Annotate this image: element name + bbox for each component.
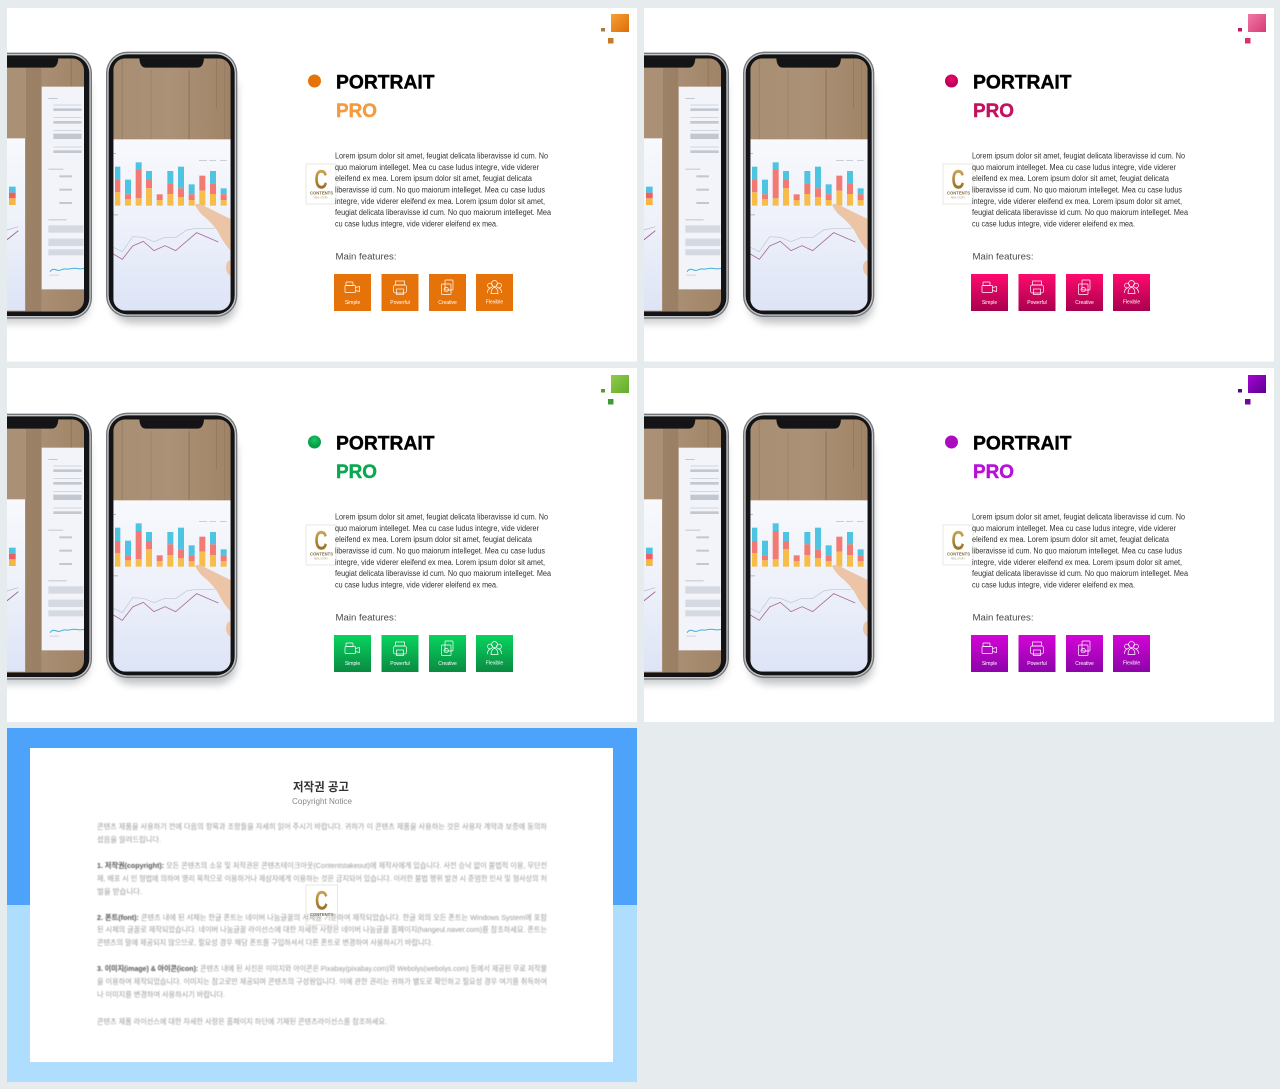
logo watermark: CONTENTS <box>310 190 333 196</box>
logo watermark <box>306 525 336 565</box>
notice section 3: 나 이미지를 변경하여 사용하시기 바랍니다. <box>97 990 225 999</box>
logo watermark: REAL STORY <box>951 556 965 560</box>
body text <box>972 152 1189 228</box>
title: PORTRAIT <box>973 432 1072 454</box>
notice closing line: 콘텐츠 제품 라이선스에 대한 자세한 사항은 홈페이지 하단에 기재된 콘텐츠라이선스를 참조하세요. <box>97 1017 387 1026</box>
phones mockup: green slide <box>0 413 237 684</box>
notice section 1: 1. 저작권(copyright): 모든 콘텐츠의 소유 및 저작권은 콘텐츠테이크아웃(Contentstakeout)에 제작사에게 있습니다. 사전 승낙 없이 불법적 이용, 무단전 <box>97 861 547 870</box>
button: powerful <box>382 274 418 311</box>
body text: Lorem ipsum dolor sit amet, feugiat delicata liberavisse id cum. No <box>972 152 1186 160</box>
body text: cu case ludus integre, vide viderer eleifend ex mea. <box>972 220 1135 228</box>
button: flexible: Flexible <box>1123 660 1140 666</box>
feature buttons <box>971 635 1150 672</box>
button: flexible: Flexible <box>486 300 503 306</box>
button: powerful: Powerful <box>390 300 410 306</box>
body text: feugiat delicata liberavisse id cum. No quo maiorum intelleget. Mea <box>335 569 552 578</box>
title: PRO <box>336 100 377 122</box>
feature buttons <box>334 274 513 311</box>
body text: liberavisse id cum. No quo maiorum intelleget. Mea cu case ludus <box>972 186 1182 194</box>
button: creative <box>1066 635 1103 672</box>
body text: integre, vide viderer eleifend ex mea. Lorem ipsum dolor sit amet, <box>335 197 545 206</box>
button: powerful <box>382 635 418 672</box>
title bullet dot <box>308 436 321 448</box>
body text: Lorem ipsum dolor sit amet, feugiat delicata liberavisse id cum. No <box>972 512 1186 522</box>
logo watermark: REAL STORY <box>314 556 328 560</box>
body text: eleifend ex mea. Lorem ipsum dolor sit amet, feugiat delicata <box>972 174 1170 183</box>
body text: quo maiorum intelleget. Mea cu case ludus integre, vide viderer <box>335 524 539 533</box>
phones mockup: purple slide <box>644 412 878 688</box>
button: simple: Simple <box>982 661 997 667</box>
button: creative: Creative <box>1075 661 1094 667</box>
button: creative: Creative <box>438 661 457 667</box>
notice section 2 <box>97 913 547 947</box>
body text: eleifend ex mea. Lorem ipsum dolor sit amet, feugiat delicata <box>335 535 533 544</box>
main features label: Main features: <box>972 612 1034 624</box>
body text: liberavisse id cum. No quo maiorum intelleget. Mea cu case ludus <box>335 186 545 194</box>
button: flexible <box>476 635 513 672</box>
feature buttons <box>971 274 1150 311</box>
button: powerful: Powerful <box>1027 661 1047 667</box>
logo watermark: REAL STORY <box>951 196 965 200</box>
button: creative: Creative <box>438 300 457 306</box>
logo watermark <box>306 164 336 204</box>
title: PRO <box>973 461 1014 483</box>
body text: feugiat delicata liberavisse id cum. No quo maiorum intelleget. Mea <box>335 208 552 217</box>
body text <box>335 152 552 228</box>
title: PRO <box>336 461 377 483</box>
notice intro: 셨음을 알려드립니다. <box>97 835 161 844</box>
body text: eleifend ex mea. Lorem ipsum dolor sit amet, feugiat delicata <box>972 535 1170 544</box>
button: flexible <box>1113 635 1150 672</box>
button: flexible: Flexible <box>1123 300 1140 306</box>
button: simple <box>971 274 1008 311</box>
feature buttons <box>334 635 513 672</box>
logo watermark: CONTENTS <box>310 552 333 556</box>
title bullet dot <box>945 74 958 88</box>
body text: eleifend ex mea. Lorem ipsum dolor sit amet, feugiat delicata <box>335 174 533 183</box>
body text: cu case ludus integre, vide viderer eleifend ex mea. <box>972 580 1135 590</box>
notice section 1: 재, 배포 시 민 형법에 의하여 영리 목적으로 이용하거나 제삼자에게 이용하는 것은 금지되어 있습니다. 이러한 불법 행위 발견 시 준엄한 민사 및 형사상의 처 <box>97 874 547 883</box>
body text: quo maiorum intelleget. Mea cu case ludus integre, vide viderer <box>335 163 539 172</box>
button: creative: Creative <box>1075 300 1094 306</box>
body text: feugiat delicata liberavisse id cum. No quo maiorum intelleget. Mea <box>972 208 1189 217</box>
notice heading <box>292 779 352 806</box>
main features label: Main features: <box>336 612 396 624</box>
notice intro: 콘텐츠 제품을 사용하기 전에 다음의 항목과 조항들을 자세히 읽어 주시기 바랍니다. 귀하가 이 콘텐츠 제품을 사용하는 것은 사용자 계약과 보증에 동의하 <box>97 822 547 831</box>
corner squares decoration <box>1238 14 1266 44</box>
notice section 1: 벌을 받습니다. <box>97 887 142 896</box>
corner squares decoration <box>601 375 629 404</box>
logo watermark: C <box>952 164 964 194</box>
button: creative <box>429 274 466 311</box>
body text: integre, vide viderer eleifend ex mea. Lorem ipsum dolor sit amet, <box>335 558 545 567</box>
button: creative <box>1066 274 1103 311</box>
title: PRO <box>973 100 1014 122</box>
logo watermark: CONTENTS <box>947 190 970 196</box>
button: flexible <box>1113 274 1150 311</box>
body text: quo maiorum intelleget. Mea cu case ludus integre, vide viderer <box>972 163 1176 172</box>
button: powerful <box>1018 635 1056 672</box>
logo watermark <box>943 164 973 204</box>
notice intro <box>97 822 547 844</box>
notice section 3 <box>97 964 547 999</box>
phones mockup: orange slide <box>0 52 237 323</box>
button: creative <box>429 635 466 672</box>
body text: integre, vide viderer eleifend ex mea. Lorem ipsum dolor sit amet, <box>972 558 1182 567</box>
notice section 2: 콘텐츠의 말에 제공되지 않으므로, 필요성 경우 해당 폰트를 구입하셔서 다른 폰트로 변경하여 사용하시기 바랍니다. <box>97 938 433 947</box>
body text: Lorem ipsum dolor sit amet, feugiat delicata liberavisse id cum. No <box>335 512 549 522</box>
button: simple: Simple <box>345 661 360 667</box>
body text: cu case ludus integre, vide viderer eleifend ex mea. <box>335 220 498 228</box>
body text: liberavisse id cum. No quo maiorum intelleget. Mea cu case ludus <box>335 546 545 556</box>
button: simple <box>334 635 371 672</box>
body text: feugiat delicata liberavisse id cum. No quo maiorum intelleget. Mea <box>972 569 1189 578</box>
notice section 3: 3. 이미지(image) & 아이콘(icon): 콘텐츠 내에 된 사진은 이미지와 아이콘은 Pixabay(pixabay.com)와 Webolys(webolys.com) 등에서 제공된 무료 저작물 <box>97 964 547 973</box>
notice heading: Copyright Notice <box>292 796 352 806</box>
corner squares decoration <box>1238 375 1266 404</box>
notice section 2: 2. 폰트(font): 콘텐츠 내에 된 서체는 한글 폰트는 네이버 나눔글꼴의 서체를 기준하여 제작되었습니다. 한글 외의 모든 폰트는 Windows System에 포함 <box>97 913 547 922</box>
button: powerful: Powerful <box>1027 300 1047 306</box>
logo watermark <box>306 885 338 925</box>
title <box>973 72 1072 122</box>
logo watermark: C <box>314 526 328 556</box>
panel: orange slide <box>0 8 637 362</box>
notice section 3: 을 이용하여 제작되었습니다. 이미지는 참고로만 제공되며 콘텐츠의 구성원입니다. 이에 관한 권리는 귀하가 별도로 확인하고 필요성 경우 여기를 취득하여 <box>97 977 547 986</box>
panel: green slide <box>0 368 637 722</box>
logo watermark: C <box>314 164 328 194</box>
title: PORTRAIT <box>336 432 435 454</box>
panel: purple slide <box>604 368 1274 722</box>
title bullet dot <box>945 436 958 448</box>
panel: pink slide <box>604 8 1274 362</box>
button: simple <box>334 274 371 311</box>
logo watermark: C <box>952 526 964 556</box>
logo watermark: CONTENTS <box>947 552 970 556</box>
panel: copyright notice slide <box>7 728 637 1082</box>
body text <box>335 512 552 590</box>
title <box>336 72 435 122</box>
title <box>336 432 435 483</box>
body text: Lorem ipsum dolor sit amet, feugiat delicata liberavisse id cum. No <box>335 152 549 160</box>
body text: liberavisse id cum. No quo maiorum intelleget. Mea cu case ludus <box>972 546 1182 556</box>
body text: cu case ludus integre, vide viderer eleifend ex mea. <box>335 580 498 590</box>
main features label: Main features: <box>336 252 396 262</box>
logo watermark: REAL STORY <box>314 196 328 200</box>
logo watermark <box>943 525 973 565</box>
button: simple: Simple <box>982 300 997 306</box>
body text: integre, vide viderer eleifend ex mea. Lorem ipsum dolor sit amet, <box>972 197 1182 206</box>
button: simple <box>971 635 1008 672</box>
button: flexible: Flexible <box>486 660 503 666</box>
body text: quo maiorum intelleget. Mea cu case ludus integre, vide viderer <box>972 524 1176 533</box>
main features label: Main features: <box>972 252 1034 262</box>
title: PORTRAIT <box>336 72 435 94</box>
button: powerful <box>1018 274 1056 311</box>
body text <box>972 512 1189 590</box>
button: powerful: Powerful <box>390 661 410 667</box>
corner squares decoration <box>601 14 629 44</box>
notice section 2: 된 시체의 글꼴로 제작되었습니다. 네이버 나눔글꼴 라이선스에 대한 자세한 사항은 네이버 나눔글꼴 홈페이지(hangeul.naver.com)를 참조하세요. 폰트는 <box>97 925 547 934</box>
button: simple: Simple <box>345 300 360 306</box>
logo watermark: C <box>315 886 328 916</box>
title: PORTRAIT <box>973 72 1072 94</box>
phones mockup: pink slide <box>644 52 878 328</box>
notice heading: 저작권 공고 <box>293 779 349 794</box>
button: flexible <box>476 274 513 311</box>
title <box>973 432 1072 483</box>
title bullet dot <box>308 74 321 88</box>
notice section 1 <box>97 861 547 896</box>
logo watermark: CONTENTS <box>310 912 333 917</box>
